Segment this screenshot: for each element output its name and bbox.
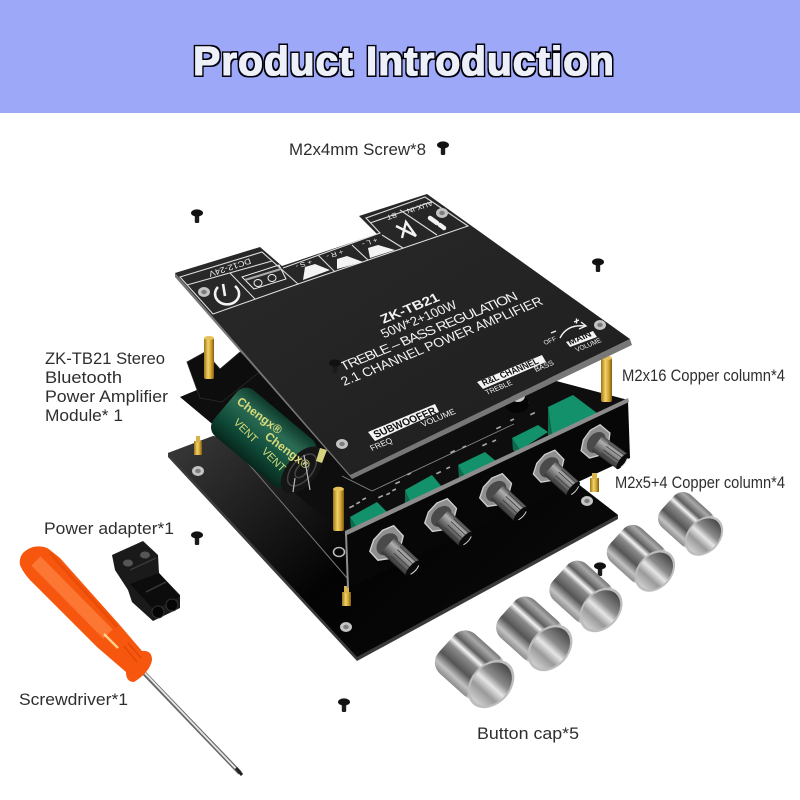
icon: screw upper left <box>191 209 203 223</box>
model text: ZK-TB21 <box>377 290 442 326</box>
regulation text: TREBLE – BASS REGULATION <box>337 289 520 373</box>
mount holes on top board <box>198 208 606 449</box>
front panel <box>345 398 630 588</box>
off label: OFF <box>543 336 559 347</box>
label: module: Module* 1 <box>45 406 123 425</box>
button cap 4 <box>601 519 683 600</box>
icon: screw top <box>437 141 449 155</box>
label: screws: M2x4mm Screw*8 <box>289 140 426 159</box>
mount holes on bottom board <box>192 466 593 632</box>
button cap 2 <box>490 590 582 680</box>
label: module: Bluetooth <box>45 368 122 387</box>
knob 2 <box>421 495 480 554</box>
inverted port labels: + R - <box>325 248 345 261</box>
inverted port labels: DC12-24V <box>207 256 252 279</box>
inverted port labels: + L - <box>360 236 379 249</box>
terminal icon <box>242 265 286 289</box>
inverted port labels: + S - <box>294 258 313 271</box>
short copper column bottom <box>342 586 351 606</box>
terminal block <box>187 352 262 402</box>
short copper column left <box>194 436 202 455</box>
icon: screw lower left <box>191 531 203 545</box>
header band <box>0 0 800 113</box>
R&L channel label: R&L CHANNEL <box>480 357 541 388</box>
capacitor brand text <box>231 394 313 475</box>
top board <box>175 194 632 479</box>
screw behind button caps <box>594 562 606 576</box>
electrolytic capacitors <box>206 383 333 503</box>
screwdriver <box>20 546 242 775</box>
silkscreen frames <box>180 197 468 314</box>
volume arrow <box>551 318 586 338</box>
short copper column right <box>590 473 599 492</box>
knob 3 <box>476 470 535 529</box>
inverted port labels: AUX-IN <box>406 199 434 215</box>
capacitor brand text: Chengx® <box>234 394 285 437</box>
tall copper column right <box>601 356 612 402</box>
power icon <box>215 284 239 304</box>
label: module <box>45 349 168 425</box>
label: module: ZK-TB21 Stereo <box>45 349 165 368</box>
knob 1 <box>365 522 428 584</box>
power adapter connector <box>112 541 180 621</box>
tall copper column left <box>204 336 214 379</box>
bluetooth icon <box>396 222 416 238</box>
icon: screw bottom <box>338 698 350 712</box>
inverted port labels <box>207 199 434 279</box>
treble label: TREBLE <box>484 379 514 397</box>
button cap 3 <box>543 555 631 641</box>
bass label: BASS <box>533 359 555 374</box>
green potentiometers <box>350 395 597 535</box>
main volume label: VOLUME <box>574 336 603 354</box>
volume label: VOLUME <box>419 407 457 429</box>
knob 4 <box>529 447 587 503</box>
aux icon <box>430 218 444 228</box>
button cap 1 <box>428 624 524 717</box>
label: power adapter: Power adapter*1 <box>44 519 174 538</box>
circuit components <box>342 402 535 508</box>
power rating text: 50W*2+100W <box>378 297 460 341</box>
speaker icons <box>303 245 395 280</box>
bottom board <box>168 433 618 661</box>
label: screwdriver: Screwdriver*1 <box>19 690 128 709</box>
tall copper column front <box>333 487 344 531</box>
knob 5 <box>577 422 635 477</box>
subwoofer label: SUBWOOFER <box>372 406 438 440</box>
hidden screw seen through board <box>329 359 341 373</box>
icon: screw upper right <box>592 258 604 272</box>
capacitor brand text: VENT <box>259 446 288 475</box>
capacitor brand text: Chengx® <box>262 429 313 472</box>
inverted port labels: BT <box>385 211 398 222</box>
capacitor brand text: VENT <box>231 417 260 446</box>
title: Product Introduction <box>193 38 614 84</box>
small capacitor <box>505 390 529 413</box>
label: module: Power Amplifier <box>45 387 168 406</box>
label: button cap: Button cap*5 <box>477 724 579 743</box>
button cap 5 <box>653 487 731 563</box>
main label: MAIN <box>566 329 593 347</box>
amplifier PCB <box>180 372 628 535</box>
amplifier text: 2.1 CHANNEL POWER AMPLIFIER <box>338 294 545 388</box>
freq label: FREQ <box>368 436 394 453</box>
